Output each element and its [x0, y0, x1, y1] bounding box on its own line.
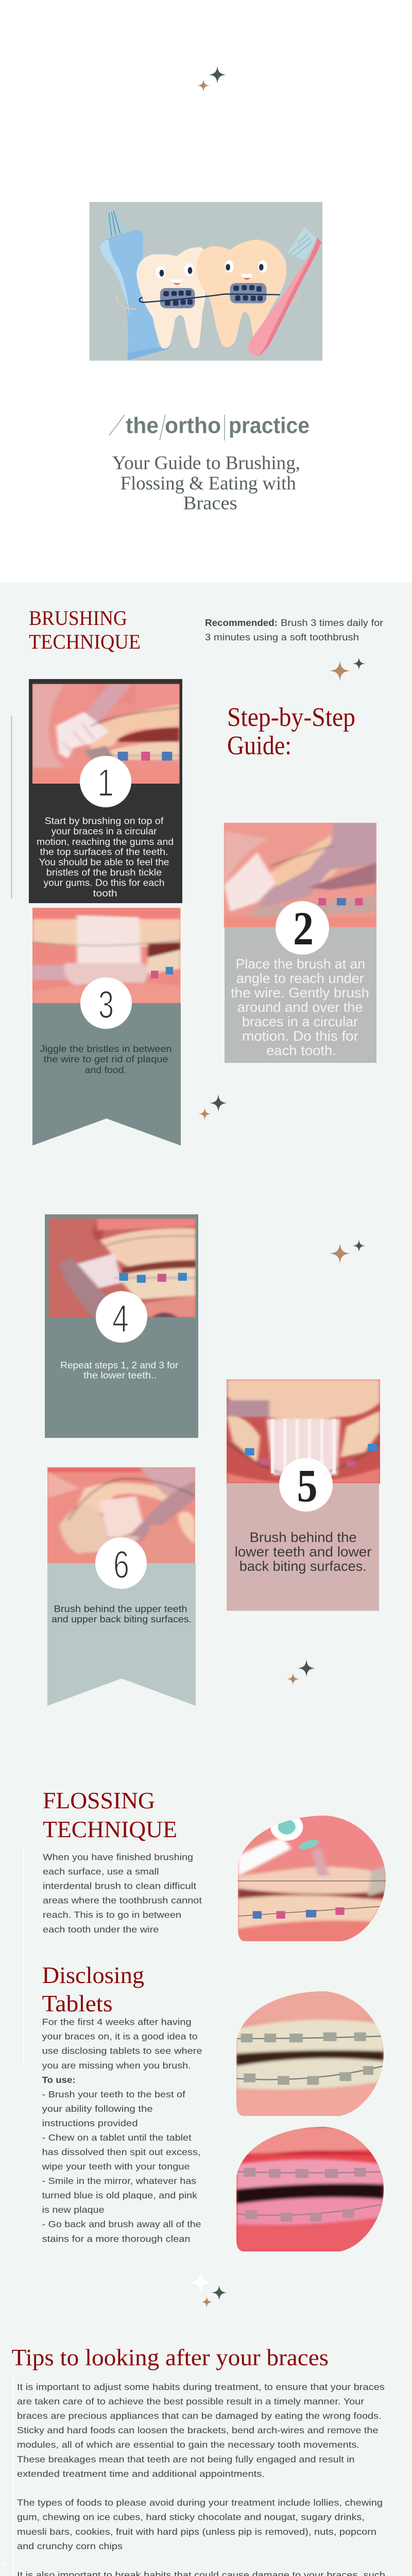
text: disclosing tablets instructions: turned blue is old plaque, and pink [42, 2190, 197, 2200]
text: step 2 instructions: braces in a circular [242, 1014, 358, 1029]
text: step 3 instructions: and food. [85, 1065, 127, 1075]
text: flossing instructions: When you have finished brushing [43, 1852, 193, 1862]
text: step 2 instructions: motion. Do this for [242, 1028, 358, 1044]
panel: step 3 [32, 908, 181, 1146]
text: tips paragraphs: It is important to adjust some habits during treatment, to ensure that your braces [17, 2382, 385, 2392]
text: disclosing tablets instructions: stains for a more thorough clean [42, 2234, 191, 2244]
text: tips paragraphs: extended treatment time and additional appointments. [17, 2469, 265, 2479]
text: step 2 instructions [231, 956, 369, 1058]
panel: step 1 [29, 679, 182, 903]
text: step 1 instructions: Start by brushing on top of [45, 816, 164, 826]
text: disclosing tablets instructions [41, 2017, 202, 2244]
text: flossing instructions: interdental brush to clean difficult [43, 1881, 196, 1891]
logo: the/ortho|practice: the [126, 413, 159, 438]
heading: brushing technique: TECHNIQUE [29, 630, 141, 653]
text: tips paragraphs: modules, all of which are essential to gain the necessary tooth movements. [17, 2439, 359, 2450]
photo: brushing lower teeth [48, 1218, 196, 1317]
badge: number 1 [80, 756, 131, 807]
icon: sparkles [330, 1240, 365, 1264]
heading: step-by-step guide [227, 703, 355, 760]
icon: sparkles [190, 2271, 227, 2308]
page background: guide section [0, 583, 412, 2576]
text: step 1 instructions: tooth [93, 888, 117, 899]
text: step 6 instructions: Brush behind the upper teeth [54, 1604, 187, 1614]
text: flossing instructions [43, 1852, 202, 1935]
text: step 2 instructions: the wire. Gently brush [231, 985, 369, 1001]
icon: sparkles [330, 657, 365, 681]
photo: jiggling bristles [32, 908, 180, 1003]
heading: brushing technique [29, 606, 141, 653]
icon: cover sparkles [197, 66, 226, 92]
text: step 5 instructions: Brush behind the [250, 1530, 357, 1545]
text: step 6 instructions [52, 1604, 192, 1624]
text: disclosing tablets instructions: has dissolved then spit out excess, [42, 2147, 201, 2157]
heading: disclosing tablets: Tablets [42, 1990, 113, 2016]
text: step 2 instructions: Place the brush at an [236, 956, 365, 972]
text: step 2 instructions: around and over the [237, 999, 363, 1015]
photo: teeth after disclosing [236, 2127, 384, 2251]
text: disclosing tablets instructions: For the first 4 weeks after having [42, 2017, 192, 2027]
heading: step-by-step guide: Step-by-Step [227, 703, 355, 732]
badge: number 6 [95, 1537, 147, 1589]
photo: interdental brush [238, 1816, 386, 1941]
heading: flossing technique: TECHNIQUE [43, 1816, 177, 1842]
logo: the/ortho|practice: ortho [165, 413, 221, 438]
text: disclosing tablets instructions: To use: [42, 2075, 76, 2085]
text: step 5 instructions: back biting surfaces. [239, 1558, 367, 1574]
heading: disclosing tablets: Disclosing [42, 1962, 144, 1988]
text: disclosing tablets instructions: wipe your teeth with your tongue [41, 2161, 190, 2172]
text: tips paragraphs: braces are precious appliances that can be damaged by eating the wrong foods. [17, 2411, 382, 2421]
icon: sparkles [199, 1094, 227, 1120]
text: step 5 instructions: lower teeth and lower [235, 1544, 372, 1560]
text: tips paragraphs: are taken care of to achieve the best possible result in a timely manner. Your [17, 2396, 364, 2406]
text: recommended brushing [205, 617, 383, 642]
photo: teeth before disclosing [236, 1991, 384, 2116]
illustration: teeth with braces, toothpaste and toothbrush [90, 202, 322, 361]
logo: the/ortho|practice [109, 413, 310, 440]
photo: behind the upper teeth [47, 1467, 195, 1563]
panel: step 6 [47, 1467, 196, 1706]
text: disclosing tablets instructions: - Go back and brush away all of the [42, 2219, 201, 2229]
text: tips paragraphs: muesli bars, cookies, fruit with hard pips (unless pip is removed), nuts, popcorn [17, 2527, 376, 2537]
text: disclosing tablets instructions: - Smile in the mirror, whatever has [42, 2176, 196, 2186]
text: step 1 instructions: your gums. Do this for each [44, 877, 164, 888]
photo: brushing upper teeth [32, 684, 179, 784]
panel: step 4 [45, 1214, 198, 1438]
text: step 1 instructions [37, 816, 174, 899]
heading: flossing technique: FLOSSING [43, 1787, 155, 1814]
badge: number 3: 3 [98, 983, 114, 1026]
text: step 4 instructions: the lower teeth.. [83, 1370, 157, 1381]
text: recommended brushing: 3 minutes using a soft toothbrush [205, 632, 359, 642]
text: flossing instructions: each tooth under the wire [43, 1924, 159, 1935]
text: step 2 instructions: each tooth. [266, 1043, 336, 1058]
text: step 3 instructions [40, 1044, 172, 1075]
text: disclosing tablets instructions: you are missing when you brush. [42, 2060, 191, 2071]
badge: number 5 [279, 1458, 333, 1512]
text: step 4 instructions: Repeat steps 1, 2 and 3 for [60, 1360, 178, 1370]
text: step 6 instructions: and upper back biting surfaces. [52, 1614, 192, 1624]
text: step 1 instructions: the top surfaces of the teeth. [40, 847, 168, 857]
heading: step-by-step guide: Guide: [227, 731, 291, 760]
text: disclosing tablets instructions: - Chew on a tablet until the tablet [42, 2132, 192, 2143]
text: step 1 instructions: motion, reaching the gums and [37, 837, 174, 847]
title: guide title: Braces [183, 493, 237, 514]
text: tips paragraphs [17, 2382, 385, 2576]
text: disclosing tablets instructions: your braces on, it is a good idea to [42, 2031, 198, 2042]
page background: cover section [0, 0, 412, 583]
photo: brush angled under wire [224, 823, 376, 927]
text: flossing instructions: areas where the toothbrush cannot [43, 1895, 202, 1906]
text: tips paragraphs: and crunchy corn chips [17, 2541, 123, 2551]
title: guide title: Your Guide to Brushing, [112, 453, 300, 474]
heading: flossing technique [43, 1787, 177, 1842]
text: disclosing tablets instructions: - Brush your teeth to the best of [42, 2089, 185, 2099]
text: tips paragraphs: gum, chewing on ice cubes, hard sticky chocolate and nougat, sugary drinks, [17, 2512, 365, 2522]
panel: step 2 [224, 823, 376, 1063]
text: disclosing tablets instructions: use disclosing tablets to see where [42, 2046, 202, 2056]
text: disclosing tablets instructions: instructions provided [42, 2118, 138, 2128]
badge: number 6: 6 [113, 1543, 129, 1586]
title: guide title: Flossing & Eating with [121, 473, 296, 494]
text: step 1 instructions: You should be able to feel the [39, 857, 169, 868]
text: step 3 instructions: the wire to get rid of plaque [44, 1054, 168, 1064]
text: step 1 instructions: bristles of the brush tickle [46, 868, 162, 878]
photo: behind the lower teeth [227, 1380, 380, 1484]
badge: number 2 [276, 901, 329, 955]
badge: number 1: 1 [97, 761, 114, 804]
text: tips paragraphs: Sticky and hard foods can loosen the brackets, bend arch-wires and remove the [17, 2425, 378, 2435]
badge: number 4: 4 [112, 1297, 129, 1340]
text: flossing instructions: reach. This is to go in between [43, 1910, 181, 1920]
title: guide title [112, 453, 300, 514]
text: disclosing tablets instructions: your ability following the [42, 2104, 153, 2114]
text: step 5 instructions [235, 1530, 372, 1574]
text: step 1 instructions: your braces in a circular [52, 826, 157, 836]
text: tips paragraphs: These breakages mean that teeth are not being fully engaged and result in [17, 2454, 355, 2465]
panel: step 5 [227, 1380, 380, 1611]
text: recommended brushing: Recommended: [205, 617, 278, 628]
heading: tips to looking after your braces: Tips to looking after your braces [11, 2344, 329, 2370]
badge: number 2: 2 [293, 902, 314, 955]
logo: the/ortho|practice: practice [229, 413, 310, 438]
text: step 3 instructions: Jiggle the bristles in between [40, 1044, 172, 1054]
text: step 4 instructions [60, 1360, 178, 1381]
badge: number 5: 5 [297, 1461, 317, 1512]
text: tips paragraphs: The types of foods to please avoid during your treatment include lollies, chewing [17, 2498, 383, 2508]
text: disclosing tablets instructions: is new plaque [42, 2205, 105, 2215]
badge: number 4 [96, 1291, 147, 1343]
text: step 2 instructions: angle to reach under [236, 971, 364, 986]
heading: brushing technique: BRUSHING [29, 606, 127, 630]
heading: disclosing tablets [42, 1962, 144, 2016]
badge: number 3 [80, 977, 132, 1029]
text: flossing instructions: each surface, use a small [43, 1866, 159, 1876]
text: recommended brushing: Brush 3 times daily for [281, 617, 383, 628]
icon: sparkles [287, 1659, 315, 1685]
